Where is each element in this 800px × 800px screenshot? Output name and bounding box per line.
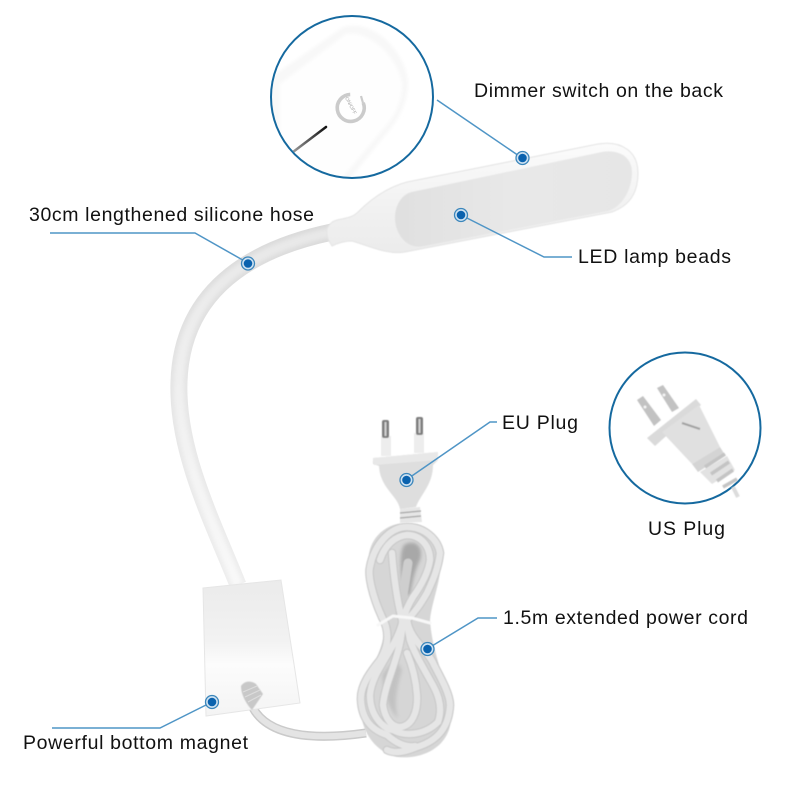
label: EU plug: EU Plug — [502, 412, 578, 434]
cable tie — [378, 616, 430, 625]
dimmer switch inset — [270, 16, 433, 190]
cord silhouette — [361, 523, 451, 757]
power icon: ON/OFF — [343, 96, 357, 116]
label: US plug: US Plug — [648, 518, 725, 540]
label: LED lamp beads: LED lamp beads — [578, 246, 731, 268]
power cord to clamp — [253, 708, 366, 736]
central hole — [401, 543, 421, 595]
silicone hose — [179, 232, 332, 585]
magnet base — [203, 580, 300, 716]
lamp head — [327, 143, 638, 253]
US plug inset — [610, 352, 760, 504]
label: dimmer switch: Dimmer switch on the back — [474, 80, 723, 102]
inset slit — [293, 127, 326, 152]
label: bottom magnet: Powerful bottom magnet — [23, 732, 249, 754]
pins — [381, 436, 391, 456]
callout: EU plug — [400, 422, 497, 486]
inset lamp back — [270, 25, 408, 190]
EU plug — [373, 417, 438, 523]
callout: dimmer switch — [437, 100, 529, 164]
callout: power cord — [421, 618, 497, 656]
callout: bottom magnet — [52, 696, 218, 728]
label: power cord: 1.5m extended power cord — [503, 607, 748, 629]
callout: LED lamp beads — [454, 208, 572, 257]
power icon — [336, 92, 366, 124]
inner strand — [400, 563, 408, 615]
coiled power cord — [361, 523, 451, 757]
label: silicone hose: 30cm lengthened silicone hose — [29, 204, 314, 226]
plug body — [373, 452, 438, 509]
callout: silicone hose — [50, 233, 254, 270]
cord strain relief — [241, 682, 263, 710]
LED panel — [395, 151, 632, 247]
